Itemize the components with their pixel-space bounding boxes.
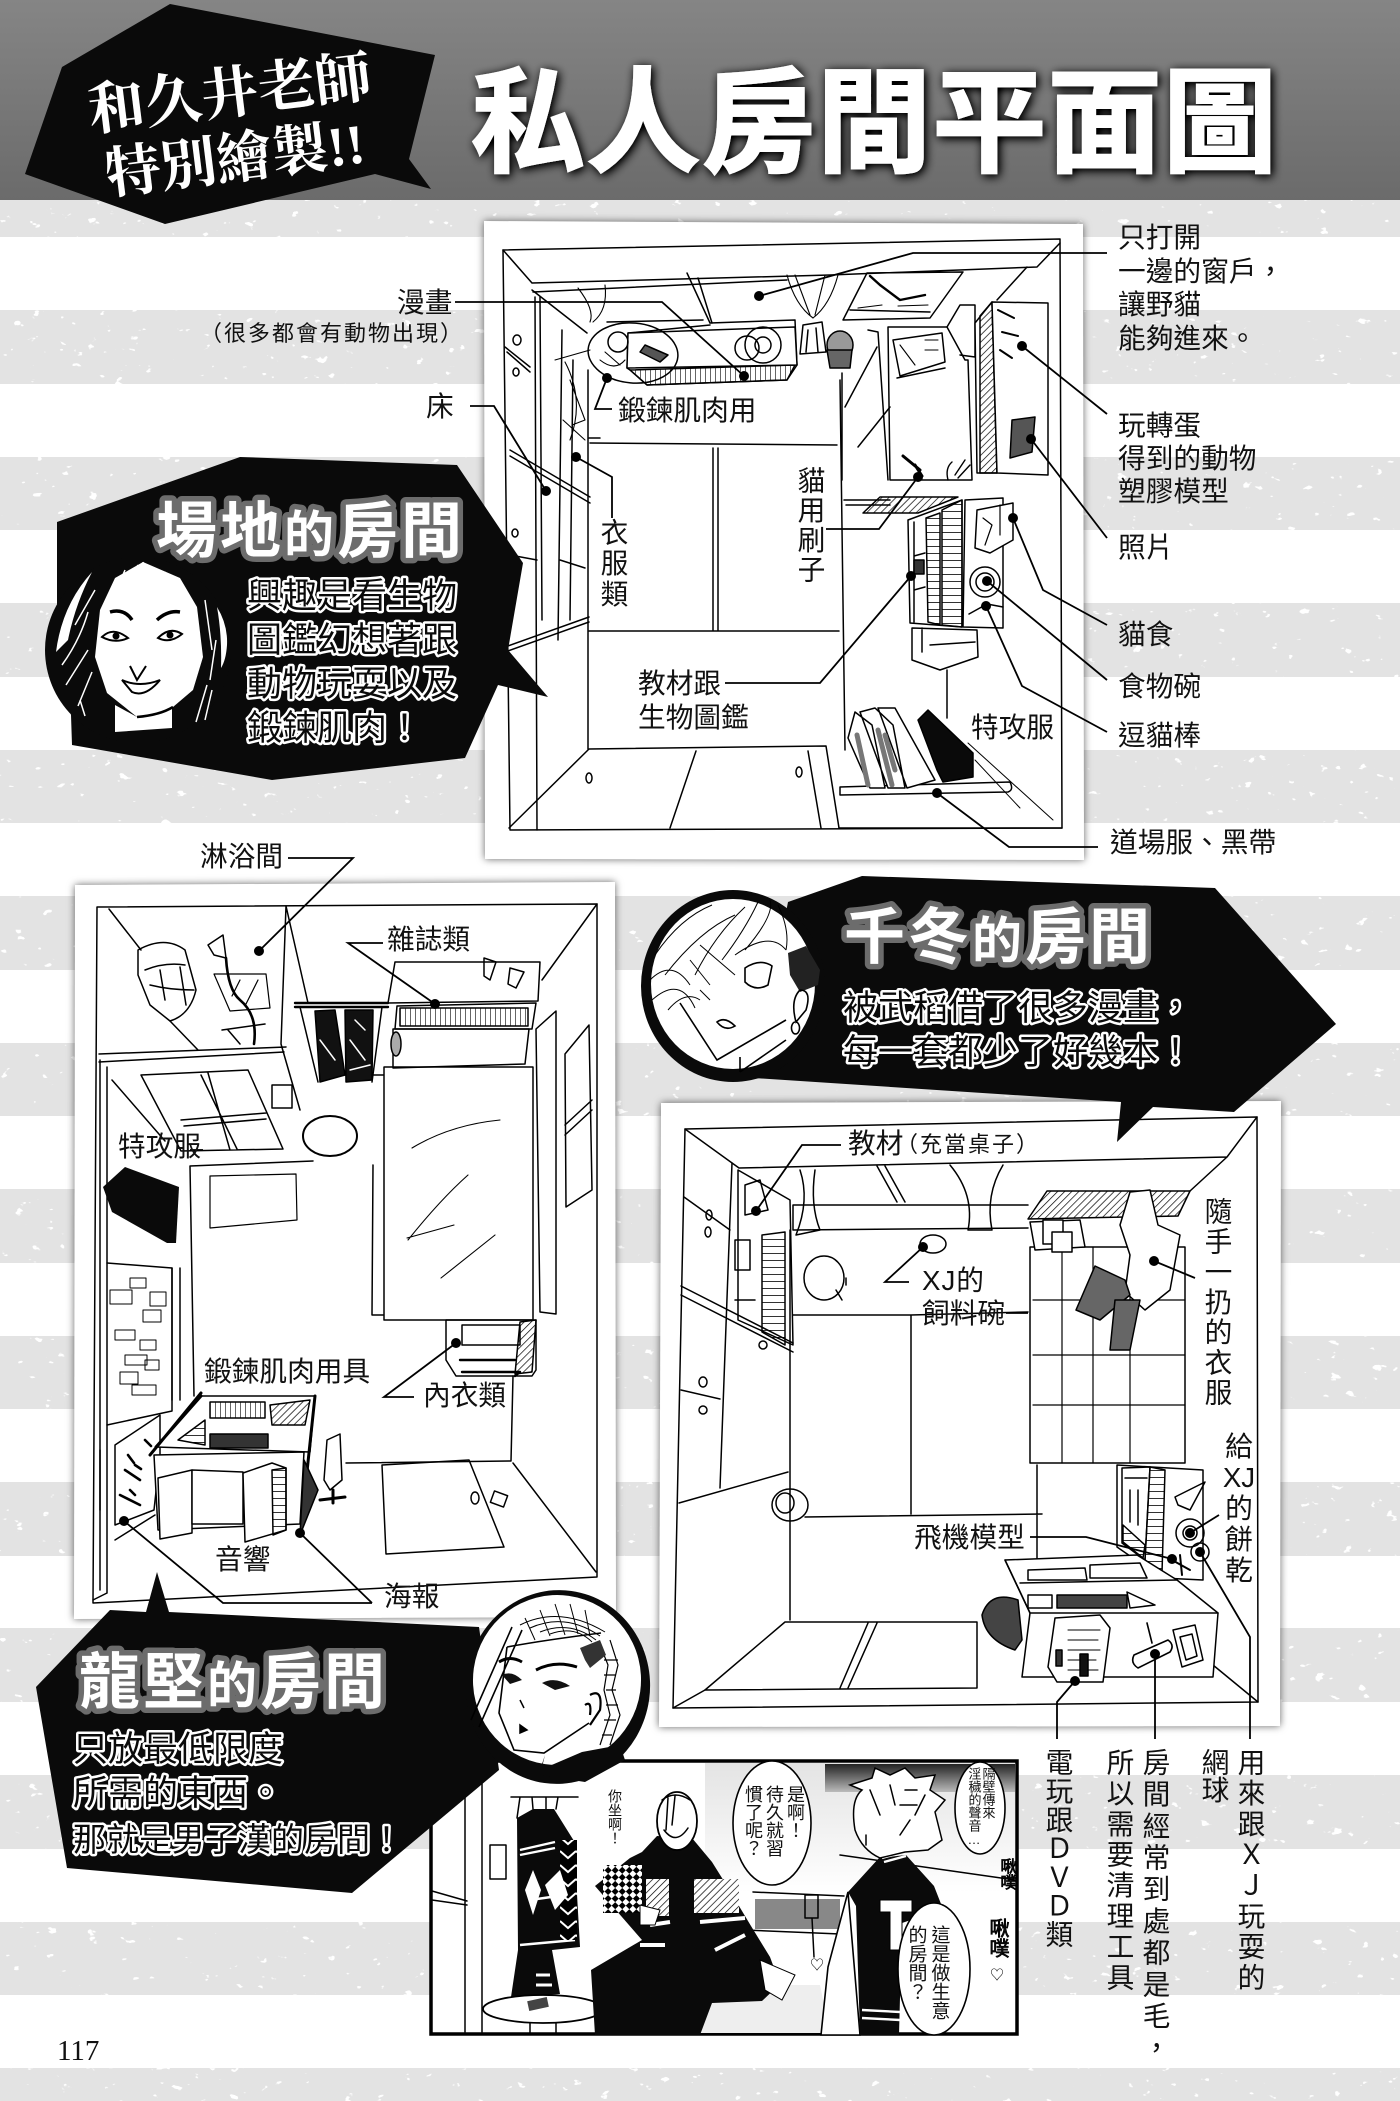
label: capsule toys: 得到的動物: [1118, 443, 1256, 474]
label: window: [754, 222, 1284, 354]
side table: [483, 1995, 603, 2034]
speech bubbles: 的房間？: [906, 1925, 927, 2001]
label: clothes: [571, 452, 628, 610]
label: bed: 床: [426, 391, 454, 422]
label: capsule toys: [1017, 341, 1256, 507]
label: poster: [119, 1516, 439, 1612]
callout body: [843, 989, 1193, 1072]
label: window: 只打開: [1118, 222, 1201, 253]
callout body: 被武稻借了很多漫畫，: [843, 989, 1193, 1028]
label: window: 一邊的窗戶，: [1118, 256, 1284, 287]
callout heading: 千冬的房間: [844, 903, 1153, 971]
label: textbooks: [638, 571, 916, 733]
room drawing: [93, 904, 597, 1603]
label: textbooks used as desk: 教材: [848, 1128, 903, 1159]
label: workout gear: 鍛鍊肌肉用具: [204, 1356, 370, 1387]
label: biscuits for XJ: 餅: [1225, 1524, 1253, 1555]
callout: Baji room: [45, 457, 548, 780]
label: gang uniform: 特攻服: [118, 1131, 201, 1162]
label: food bowl: 食物碗: [1118, 671, 1201, 702]
header band: [0, 0, 1400, 200]
callout body: [73, 1730, 403, 1858]
label: tossed clothes: 隨手一扔的衣服: [1200, 1197, 1232, 1408]
label: window: 能夠進來。: [1118, 323, 1256, 354]
label: cat food: 貓食: [1118, 619, 1173, 650]
callout: specially drawn by the author: [25, 4, 435, 224]
panel: Chifuyu room floor plan: [659, 1101, 1281, 1727]
label: magazines: 雜誌類: [387, 924, 470, 955]
label: stereo: 音響: [215, 1544, 270, 1575]
label: cleaning tools: [1102, 1649, 1170, 2065]
callout text line 2: 特別繪製!!: [102, 113, 368, 207]
callout: Draken room: [36, 1572, 663, 1893]
speech bubbles: ♡: [990, 1967, 1004, 1983]
label: dojo uniform: 道場服、黑帶: [1110, 827, 1276, 858]
label: cleaning tools: 所以需要清理工具: [1102, 1748, 1134, 1994]
panel: Baji room floor plan: [200, 221, 1284, 860]
label: biscuits for XJ: 的: [1225, 1493, 1253, 1524]
label: window: 讓野貓: [1118, 289, 1201, 320]
speech bubbles: 隔壁傳來: [980, 1767, 996, 1819]
label: underwear: [384, 1338, 506, 1411]
callout body: 圖鑑幻想著跟: [247, 621, 457, 660]
label: cat teaser: [981, 601, 1201, 751]
callout body: [247, 577, 457, 748]
label: games and DVDs: [1042, 1676, 1080, 1949]
label: XJ food bowl: 飼料碗: [922, 1298, 1005, 1329]
speech bubbles: 待久就習: [764, 1785, 784, 1857]
callout text line 1: 和久井老師: [85, 46, 375, 143]
label: model plane: [914, 1522, 1177, 1564]
speech bubbles: 啾噗: [998, 1858, 1016, 1890]
room drawing: [503, 239, 1062, 830]
callout body: 每一套都少了好幾本！: [843, 1033, 1193, 1072]
label: XJ food bowl: XJ的: [922, 1265, 984, 1296]
speech bubbles: 是啊！: [785, 1785, 805, 1839]
callout body: 所需的東西。: [73, 1774, 283, 1813]
label: clothes: 衣服類: [596, 518, 628, 610]
label: capsule toys: 塑膠模型: [1118, 476, 1229, 507]
callout body: 那就是男子漢的房間！: [73, 1821, 403, 1858]
callout body: 只放最低限度: [73, 1730, 283, 1769]
label: manga: 漫畫: [397, 287, 452, 318]
panel: Draken room floor plan: [74, 841, 616, 1619]
label: biscuits for XJ: [1185, 1431, 1255, 1586]
callout heading: 龍堅的房間: [79, 1648, 388, 1716]
label: XJ food bowl: [885, 1242, 1028, 1329]
portrait: Draken: [453, 1578, 663, 1796]
speech bubbles: [607, 1761, 1016, 2035]
label: biscuits for XJ: 給: [1225, 1431, 1253, 1462]
speech bubbles: 你坐啊！: [607, 1789, 623, 1845]
label: workout: [595, 373, 756, 426]
label: games and DVDs: 電玩跟ＤＶＤ類: [1042, 1748, 1073, 1949]
label: textbooks used as desk: [751, 1128, 1040, 1216]
label: photo: 照片: [1118, 532, 1173, 563]
label: magazines: [348, 924, 470, 1009]
label: cat teaser: 逗貓棒: [1118, 720, 1201, 751]
speech bubbles: 啾噗: [986, 1918, 1008, 1958]
paper sheet: [484, 221, 1084, 860]
label: textbooks: 生物圖鑑: [638, 702, 749, 733]
icon: gang uniform tag: [103, 1167, 179, 1243]
label: cat brush: [794, 466, 923, 585]
paper sheet: [74, 882, 616, 1619]
label: manga: （很多都會有動物出現）: [200, 321, 464, 346]
portrait: Baji: [45, 557, 231, 743]
label: tennis ball: [1195, 1547, 1265, 1994]
callout body: 鍛鍊肌肉！: [247, 709, 422, 748]
manga panel: [431, 1761, 1017, 2035]
hanging jacket: [511, 1809, 580, 1997]
speech bubbles: 淫穢的聲音…: [966, 1767, 982, 1847]
label: food bowl: [982, 576, 1201, 702]
label: tossed clothes: [1149, 1197, 1232, 1408]
paper sheet: [659, 1101, 1281, 1727]
figure: Draken seated: [591, 1792, 795, 2035]
label: textbooks used as desk: （充當桌子）: [896, 1132, 1040, 1157]
label: bed: [426, 391, 551, 496]
label: gang uniform: 特攻服: [971, 712, 1054, 743]
label: workout: 鍛鍊肌肉用: [618, 395, 756, 426]
label: poster: 海報: [384, 1581, 439, 1612]
figure: Takemichi from behind: [821, 1768, 945, 2035]
callout: Chifuyu room: [641, 876, 1336, 1142]
label: cat brush: 貓用刷子: [794, 466, 825, 585]
label: model plane: 飛機模型: [914, 1522, 1025, 1553]
main title: 私人房間平面圖: [471, 61, 1277, 188]
manga background: [432, 1763, 1015, 2033]
speech bubbles: 慣了呢？: [743, 1785, 763, 1857]
label: dojo uniform: [932, 788, 1276, 858]
label: underwear: 內衣類: [423, 1380, 506, 1411]
label: manga: [200, 287, 749, 381]
speech bubbles: 這是做生意: [928, 1925, 950, 2020]
portrait: Chifuyu: [641, 890, 825, 1082]
speech bubbles: ♡: [810, 1957, 824, 1973]
callout heading: 場地的房間: [156, 497, 465, 565]
label: photo: [1026, 434, 1173, 563]
room drawing: [673, 1117, 1258, 1708]
callout body: 動物玩耍以及: [247, 665, 457, 704]
label: shower room: [200, 841, 353, 956]
label: shower room: 淋浴間: [200, 841, 283, 872]
label: tennis ball: 網球: [1198, 1748, 1229, 1803]
label: tennis ball: 用來跟ＸＪ玩耍的: [1234, 1748, 1265, 1994]
label: biscuits for XJ: XJ: [1223, 1462, 1255, 1493]
callout body: 興趣是看生物: [247, 577, 457, 616]
label: cat food: [1008, 513, 1173, 650]
label: capsule toys: 玩轉蛋: [1118, 410, 1201, 441]
label: biscuits for XJ: 乾: [1225, 1555, 1253, 1586]
page number: 117: [57, 2035, 99, 2067]
label: cleaning tools: 房間經常到處都是毛，: [1138, 1748, 1170, 2065]
label: textbooks: 教材跟: [638, 668, 721, 699]
